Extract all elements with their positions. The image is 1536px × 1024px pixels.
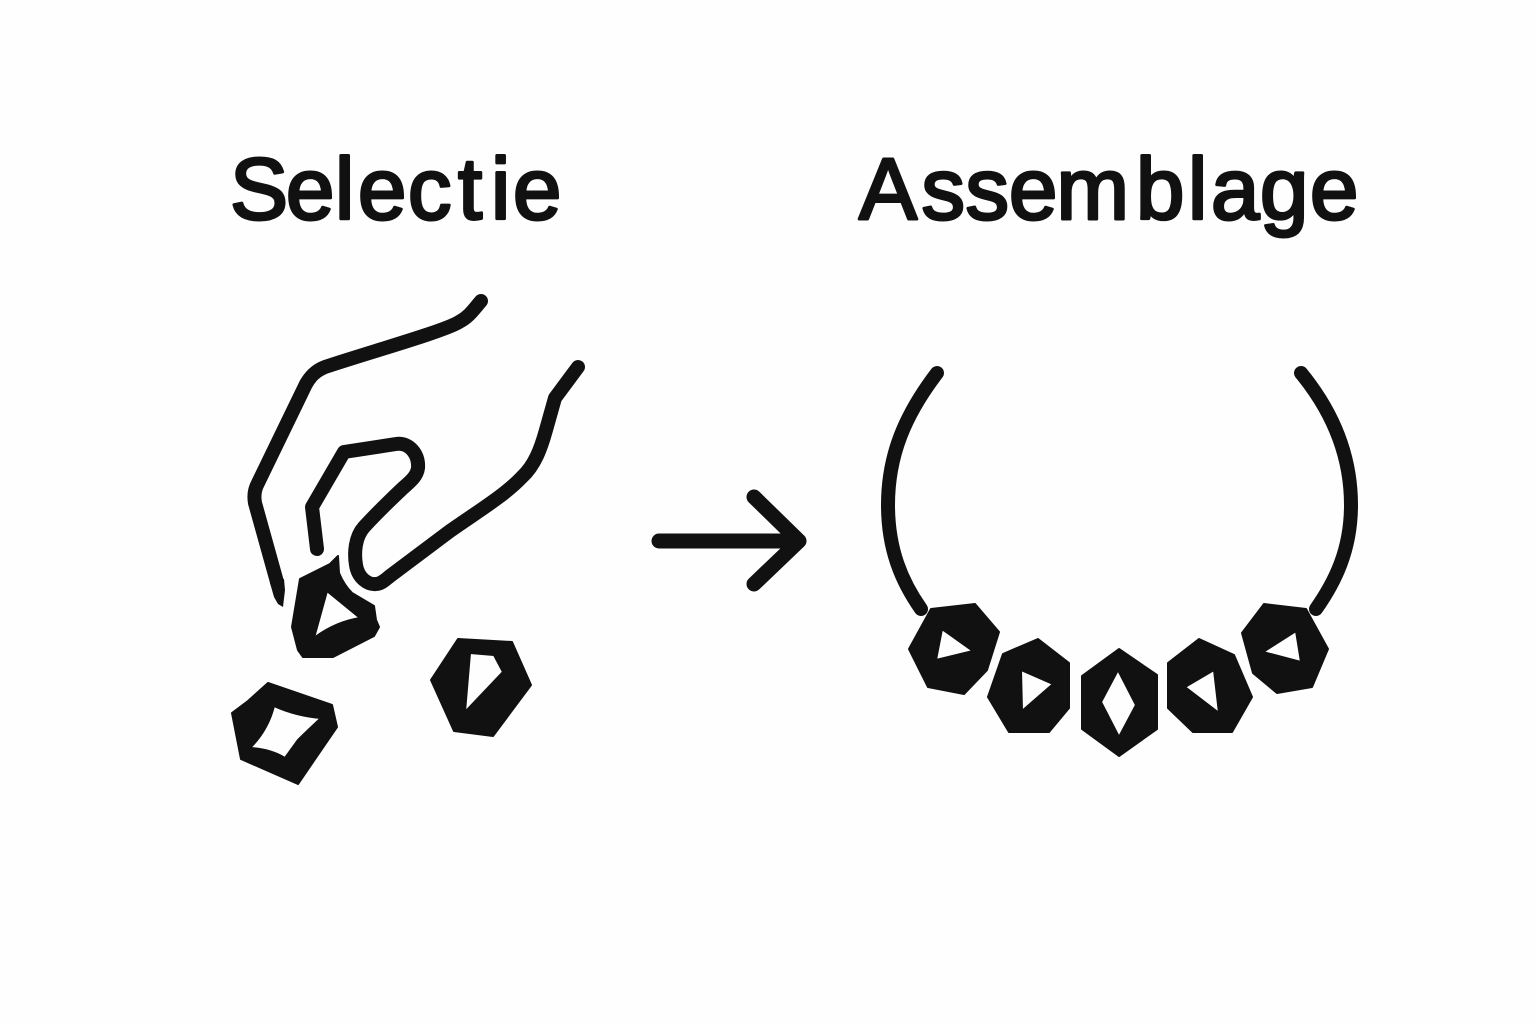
bead 2 <box>988 639 1069 732</box>
bead 4 <box>1168 639 1252 732</box>
necklace cord right <box>1301 373 1351 609</box>
panel: assemblage <box>859 141 1358 756</box>
hand finger and thumb contour <box>312 367 578 584</box>
bead 3 <box>1082 649 1157 756</box>
heading: Selectie: Selectie <box>230 141 561 238</box>
bead 1 <box>909 604 999 694</box>
heading: Assemblage: Assemblage <box>859 141 1358 238</box>
gem held by the hand <box>292 556 379 657</box>
icon: hand picking a gem <box>254 301 578 657</box>
arrow <box>659 497 799 584</box>
icon: loose gem left <box>232 683 337 784</box>
icon: loose gem right <box>431 639 531 736</box>
bead 5 <box>1242 604 1328 693</box>
hand outer contour <box>254 301 481 607</box>
necklace cord left <box>888 373 937 609</box>
panel: selectie <box>230 141 578 784</box>
